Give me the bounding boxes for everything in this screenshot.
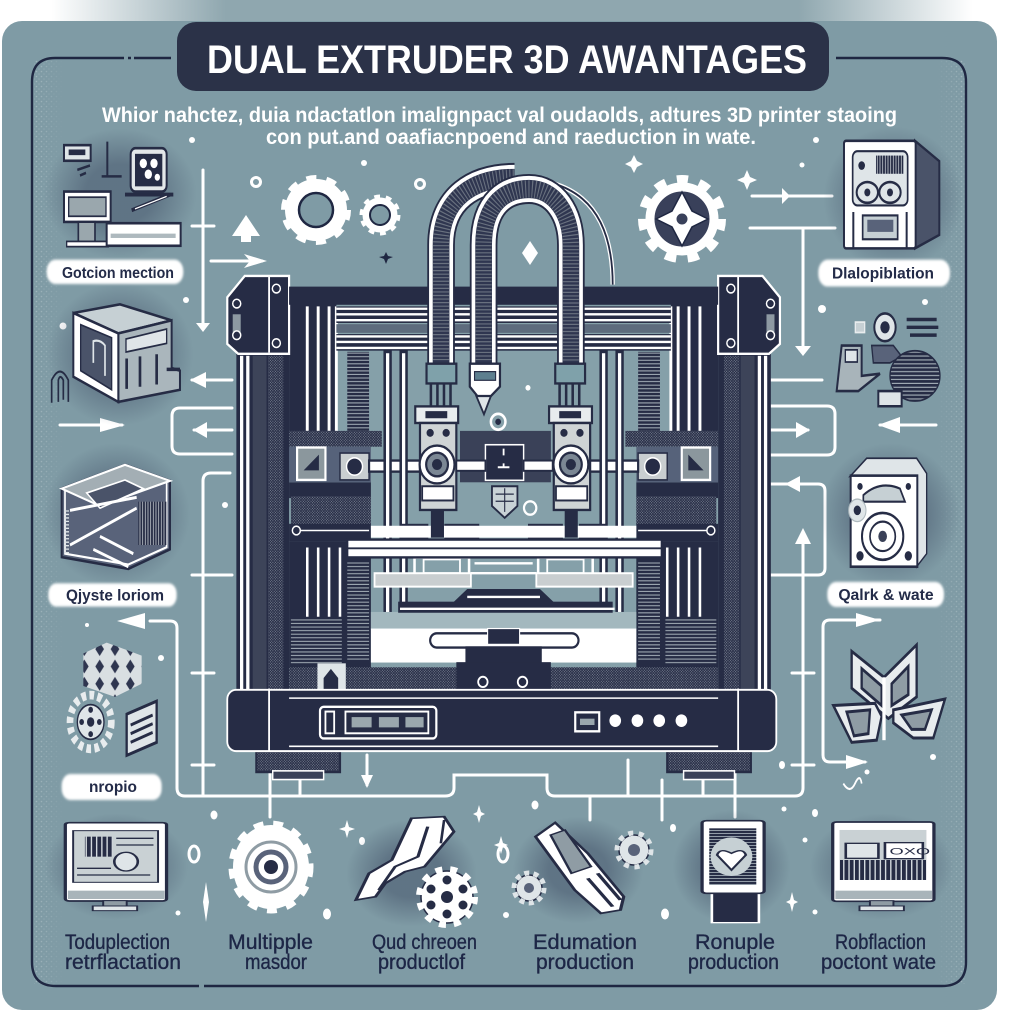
label pill: nropio: [62, 774, 162, 800]
label pill: Qalrk & wate: [827, 582, 944, 607]
label pill: Dlalopiblation: Dlalopiblation: [832, 264, 934, 282]
small label icon: [317, 663, 346, 694]
3D printer: [227, 178, 780, 780]
subtitle: [102, 104, 897, 149]
icon: lattice and gear parts: [70, 643, 157, 755]
crossbars: [347, 461, 662, 613]
title banner: DUAL EXTRUDER 3D AWANTAGES: [207, 38, 807, 82]
gear: upper right with flower: [643, 180, 721, 258]
bottom labels: Robflaction: [835, 931, 926, 954]
icon: speaker module: [820, 443, 960, 586]
diamond: [522, 241, 538, 265]
bottom labels: Qud chreoen: [372, 931, 477, 954]
bottom labels: Multipple: [228, 931, 313, 954]
icon: device with heart: [673, 810, 790, 923]
icon: striped tool: [513, 817, 643, 923]
gear: bottom cog with holes: [419, 869, 475, 925]
top bar: [289, 287, 718, 305]
dark sparkle: [379, 252, 393, 264]
light print bed area: [371, 526, 636, 663]
filament tube right: [484, 189, 571, 364]
label pill: Qjyste loriom: Qjyste loriom: [66, 586, 164, 604]
bottom labels: retrflactation: [65, 951, 181, 974]
bottom labels: poctont wate: [821, 951, 936, 974]
filament tube left: [441, 178, 613, 364]
bottom labels: Toduplection: [65, 931, 170, 954]
title banner: [177, 22, 829, 91]
base with control panel: [227, 689, 776, 751]
icon: key tool: [346, 817, 477, 927]
label pill: Gotcion mection: [47, 260, 183, 284]
gears: bottom small pair: [514, 833, 651, 903]
label pill: nropio: nropio: [89, 777, 137, 795]
gear: upper left large: [285, 179, 347, 241]
icon: printer console: [823, 127, 963, 270]
gear: upper left small: [362, 197, 398, 233]
small rings: [189, 178, 508, 862]
bottom labels: production: [536, 951, 634, 974]
bottom labels: Edumation: [533, 931, 637, 954]
icon: 3D printer cube: [47, 283, 193, 426]
bottom labels: productlof: [378, 951, 465, 974]
bottom labels: production: [688, 951, 779, 974]
top background fade: [0, 0, 1024, 40]
label pill: Dlalopiblation: [818, 260, 950, 287]
icon: printer mechanism: [43, 443, 190, 586]
icon: monitor two: OXO: [890, 847, 930, 857]
triangle arrow: [232, 215, 260, 242]
arrowheads: [100, 188, 900, 788]
tube collars and nozzle: [427, 364, 585, 414]
floating dots and sparkles: [60, 137, 936, 922]
squiggle mark: [843, 778, 862, 789]
upper rails: [336, 306, 671, 351]
left column icons: [43, 129, 197, 800]
gear: bottom multiple: [231, 823, 311, 911]
connector lines: [60, 170, 936, 820]
right column icons: [818, 127, 963, 789]
label pill: Gotcion mection: Gotcion mection: [62, 263, 174, 281]
bottom labels: masdor: [245, 951, 307, 974]
subtitle: Whior nahctez, duia ndactatlon imalignpact val oudaolds, adtures 3D printer staoing: [102, 104, 897, 127]
label pill: Qjyste loriom: [48, 583, 177, 607]
label pill: Qalrk & wate: Qalrk & wate: [838, 586, 934, 603]
print platform: [430, 629, 579, 698]
subtitle: con put.and oaafiacnpoend and raeduction in wate.: [266, 126, 756, 149]
icon: desktop computer set: [43, 129, 197, 259]
bottom row icons: [44, 810, 954, 927]
extruder heads: [415, 406, 458, 538]
icon: machine parts: [837, 313, 940, 406]
bottom labels: [65, 931, 936, 974]
icon: monitor one: [44, 813, 188, 920]
bottom dither bar: [289, 667, 718, 696]
icon: monitor two: [810, 813, 954, 920]
printer interior: [289, 289, 718, 696]
icon: geometric blocks: [833, 645, 945, 742]
central carriage: [460, 385, 551, 518]
bottom labels: Ronuple: [695, 931, 775, 954]
